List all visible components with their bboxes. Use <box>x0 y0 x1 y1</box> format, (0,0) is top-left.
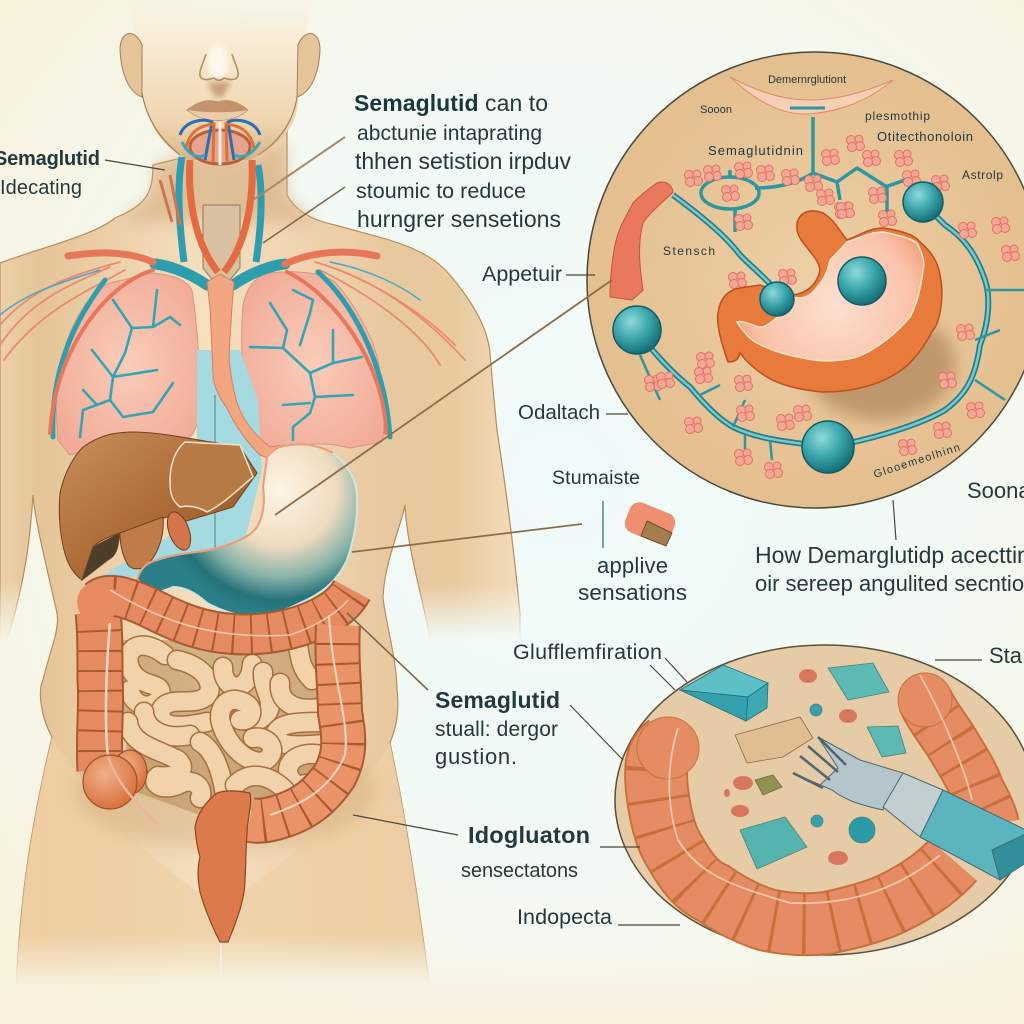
receptor clusters <box>644 135 1020 478</box>
callout: top centre: abctunie intaprating <box>357 122 542 145</box>
fork <box>793 737 903 810</box>
lens structure <box>730 77 893 114</box>
stomach lesser curve edge <box>137 444 333 580</box>
receptor balls <box>613 182 943 473</box>
nose <box>200 44 238 97</box>
human torso figure <box>0 0 520 990</box>
left and lower intestine <box>637 717 953 924</box>
callout: lower centre: gustion. <box>435 744 517 769</box>
right intestine <box>898 673 992 825</box>
food pieces <box>724 663 906 869</box>
panel labels: plesmothip <box>865 109 930 123</box>
label: odaltach: Odaltach <box>518 401 600 424</box>
lungs <box>56 272 384 455</box>
syringe <box>883 773 1024 880</box>
label: top-left <box>0 148 100 199</box>
receptor network <box>640 117 1024 460</box>
icon: pill <box>622 499 678 547</box>
panel labels: Astrolp <box>962 168 1003 182</box>
caption: how semaglutide acts: How Demarglutidp acecttin <box>755 542 1024 568</box>
label: applive sensations <box>578 553 687 605</box>
leader lines <box>105 137 982 925</box>
sigmoid thin tail <box>220 943 222 985</box>
chest vessels <box>0 252 465 437</box>
callout: lower centre: Semaglutid <box>435 687 560 713</box>
mediastinum <box>100 350 262 577</box>
callout: idogluaton: sensectatons <box>461 860 578 882</box>
neck shading <box>120 140 320 222</box>
sigmoid colon <box>195 791 251 942</box>
stomach <box>718 211 942 392</box>
small intestine bed <box>118 640 330 815</box>
callout: idogluaton: Idogluaton <box>468 822 590 848</box>
liver <box>59 432 257 580</box>
esophagus <box>207 274 285 462</box>
callout: top centre: Semaglutid can to <box>354 90 548 116</box>
bottom warm fade <box>0 950 1024 1024</box>
panel labels: Otitecthonoloin <box>877 129 973 144</box>
panel labels <box>663 74 1003 481</box>
callout: top centre: hurngrer sensetions <box>357 206 561 232</box>
teal tube <box>680 665 768 721</box>
callout: idogluaton <box>461 822 590 882</box>
caption: how semaglutide acts <box>755 542 1024 596</box>
small intestine <box>128 645 323 798</box>
neck vessels <box>160 157 261 272</box>
head <box>128 0 312 160</box>
cecum <box>83 750 147 809</box>
callout: lower centre: stuall: dergor <box>435 718 558 741</box>
chin vessel bundle <box>180 120 260 165</box>
panel: intestine and food circle <box>615 645 1024 955</box>
panel labels: Demernrglutiont <box>768 74 846 86</box>
stomach shadow <box>805 310 955 420</box>
appendix <box>108 757 158 825</box>
left organ strip <box>610 182 673 300</box>
panel labels: Stensch <box>663 244 715 258</box>
panel labels: Semaglutidnin <box>708 143 803 158</box>
callout: lower centre <box>435 687 560 769</box>
abdominal shadow <box>75 730 375 850</box>
label: appetite: Appetuir <box>482 262 562 286</box>
stomach <box>137 444 357 617</box>
trachea <box>203 205 240 282</box>
panel: stomach mechanism circle <box>587 52 1024 508</box>
label: stumaiste: Stumaiste <box>552 467 640 489</box>
label: gluf: Glufflemfiration <box>513 640 662 664</box>
large intestine <box>77 581 352 821</box>
label: applive sensations: applive <box>597 553 668 578</box>
panel labels: Glooemeolhinn <box>872 442 962 481</box>
ears <box>120 34 320 97</box>
label: top-left: Idecating <box>0 177 82 199</box>
bronchi <box>80 290 362 440</box>
label: sta: Sta <box>989 643 1023 668</box>
label: indopecta: Indopecta <box>517 905 612 929</box>
jaw outline <box>142 92 297 155</box>
lips <box>187 101 248 120</box>
body silhouette <box>0 132 520 990</box>
panel labels: Sooon <box>700 104 732 116</box>
callout: top centre: thhen setistion irpduv <box>355 148 572 174</box>
label: applive sensations: sensations <box>578 580 687 605</box>
callout: top centre: stoumic to reduce <box>356 179 526 203</box>
callout: top centre <box>354 90 572 232</box>
